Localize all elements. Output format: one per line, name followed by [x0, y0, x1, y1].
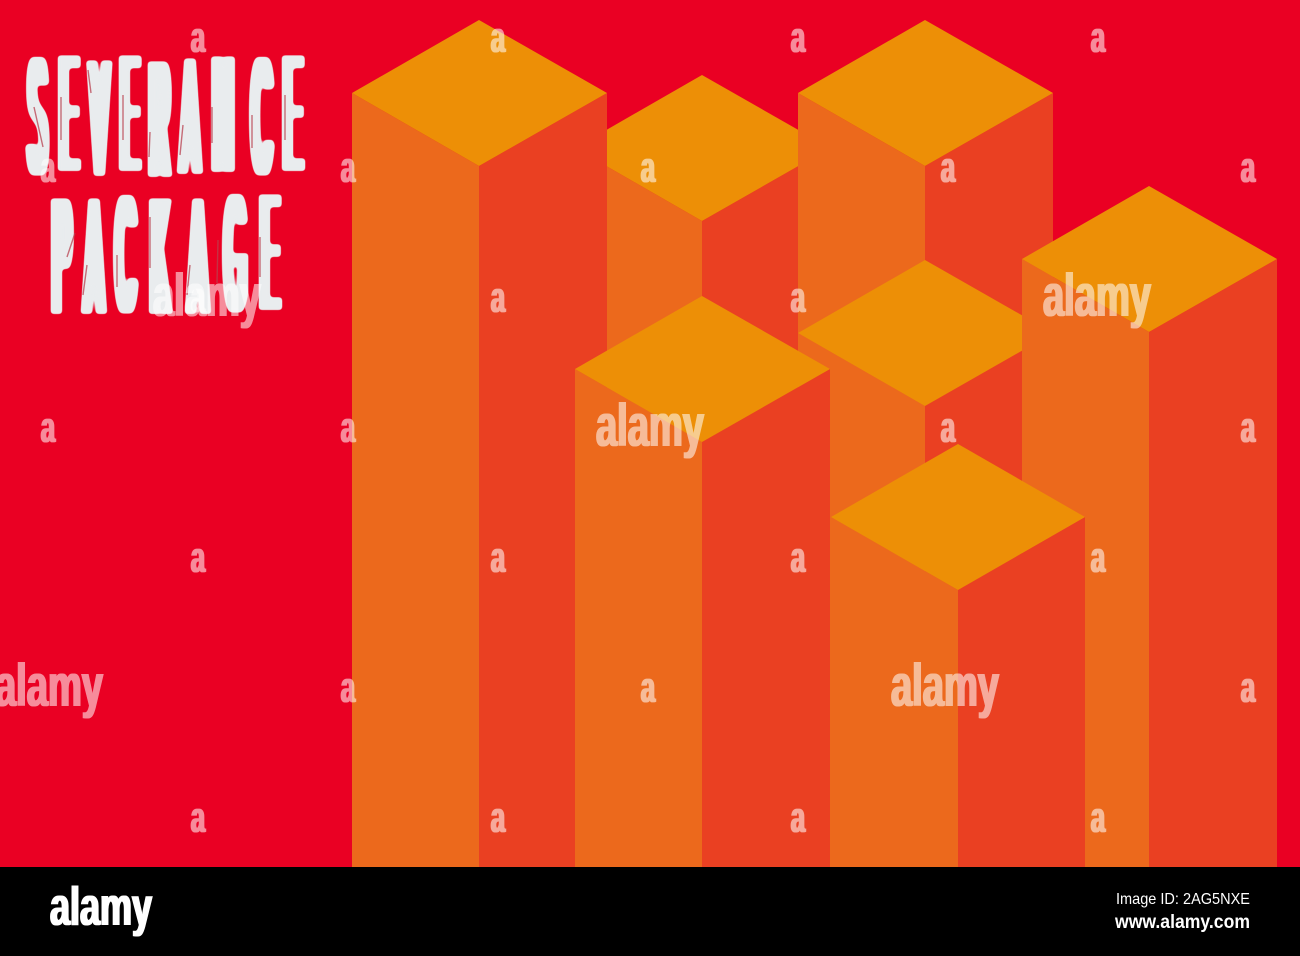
watermark: small letter marks: a — [791, 12, 806, 62]
column 7 front right — [831, 444, 1085, 867]
title scratches — [34, 70, 285, 295]
watermark: alamy words — [0, 262, 1151, 719]
footer image id: Image ID: 2AG5NXE — [1116, 891, 1250, 908]
watermark: small letter marks: a — [341, 142, 356, 192]
title — [28, 20, 302, 350]
column 3 tall right — [798, 20, 1053, 867]
watermark: small letter marks: a — [491, 272, 506, 322]
watermark: small letter marks: a — [491, 12, 506, 62]
watermark: small letter marks: a — [1091, 792, 1106, 842]
column 2 back centre — [575, 75, 830, 867]
watermark: small letter marks: a — [1241, 402, 1256, 452]
watermark: alamy words: alamy — [891, 652, 999, 719]
watermark: alamy words: alamy — [596, 392, 704, 459]
watermark: small letter marks: a — [191, 12, 206, 62]
watermark: small letter marks: a — [941, 402, 956, 452]
watermark: small letter marks: a — [791, 532, 806, 582]
watermark: small letter marks: a — [491, 532, 506, 582]
watermark: small letter marks: a — [341, 662, 356, 712]
watermark: small letter marks: a — [791, 792, 806, 842]
watermark: small letter marks: a — [641, 662, 656, 712]
title line: severance: SEVERANCE — [28, 20, 302, 213]
watermark: small letter marks: a — [191, 792, 206, 842]
watermark: small letter marks: a — [791, 272, 806, 322]
watermark: small letter marks: a — [641, 142, 656, 192]
watermark: small letter marks: a — [41, 142, 56, 192]
column 5 far right — [1022, 186, 1277, 867]
bar chart: isometric columns — [352, 20, 1277, 867]
watermark: small letter marks: a — [1091, 12, 1106, 62]
watermark: small letter marks: a — [1241, 662, 1256, 712]
watermark: small letter marks: a — [491, 792, 506, 842]
watermark: alamy words: alamy — [1043, 262, 1151, 329]
watermark: small letter marks: a — [1241, 142, 1256, 192]
watermark: small letter marks: a — [941, 142, 956, 192]
watermark: small letter marks: a — [341, 402, 356, 452]
title line: package: PACKAGE — [53, 159, 279, 350]
footer bar — [0, 867, 1300, 956]
watermark: alamy words: alamy — [0, 652, 103, 719]
watermark: small letter marks: a — [41, 402, 56, 452]
column 6 front centre — [575, 296, 830, 867]
footer website: www.alamy.com — [1114, 912, 1250, 933]
watermark: alamy words: alamy — [153, 262, 261, 329]
watermark: small letter marks: a — [1091, 532, 1106, 582]
footer logo: alamy — [50, 875, 152, 937]
column 4 middle — [798, 260, 1053, 867]
watermark: small letter marks: a — [191, 272, 206, 322]
column 1 tall left — [352, 20, 607, 867]
watermark: small letter marks: a — [191, 532, 206, 582]
